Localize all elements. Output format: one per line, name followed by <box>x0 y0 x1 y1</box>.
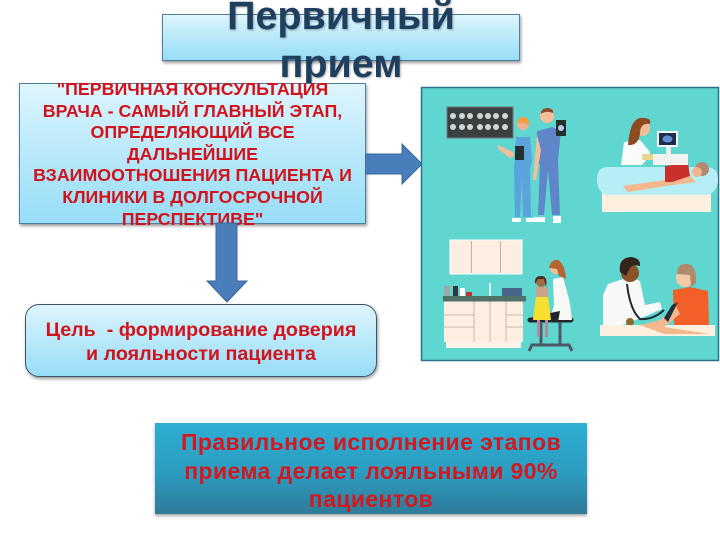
quote text: КЛИНИКИ В ДОЛГОСРОЧНОЙ <box>62 187 323 207</box>
arrow: to illustration <box>365 143 421 185</box>
scene: doctor measuring blood pressure <box>600 257 715 336</box>
scene: clinic cabinets <box>443 240 526 348</box>
goal text <box>46 319 356 364</box>
illustration background <box>422 88 718 360</box>
conclusion text: приема делает лояльными 90% <box>184 458 558 484</box>
conclusion text: пациентов <box>309 486 433 512</box>
figure: doctor with tablet <box>533 108 566 223</box>
conclusion text <box>181 429 561 512</box>
quote text: ВРАЧА - САМЫЙ ГЛАВНЫЙ ЭТАП, <box>43 101 342 121</box>
scene: ultrasound bed and patient <box>597 162 718 212</box>
quote text: ДАЛЬНЕЙШИЕ <box>127 144 258 164</box>
panel: conclusion <box>155 423 587 514</box>
goal text: Цель - формирование доверия <box>46 319 356 341</box>
figure: nurse <box>498 117 537 222</box>
panel: goal <box>25 304 377 377</box>
quote text: ОПРЕДЕЛЯЮЩИЙ ВСЕ <box>91 122 294 142</box>
title panel <box>162 14 520 61</box>
panel: quote <box>19 83 366 224</box>
figure: sonographer with monitor <box>621 118 688 165</box>
quote text: ВЗАИМООТНОШЕНИЯ ПАЦИЕНТА И <box>33 165 352 185</box>
quote text: ПЕРСПЕКТИВЕ" <box>122 209 263 229</box>
scene: girl and doctor on stools <box>529 260 572 351</box>
scene: brain scan board <box>447 107 513 138</box>
quote text <box>33 79 352 229</box>
title: прием <box>280 42 402 86</box>
goal text: и лояльности пациента <box>86 342 316 364</box>
conclusion text: Правильное исполнение этапов <box>181 429 561 455</box>
title <box>227 0 455 86</box>
quote text: "ПЕРВИЧНАЯ КОНСУЛЬТАЦИЯ <box>57 79 328 99</box>
arrow: to goal <box>206 222 248 303</box>
